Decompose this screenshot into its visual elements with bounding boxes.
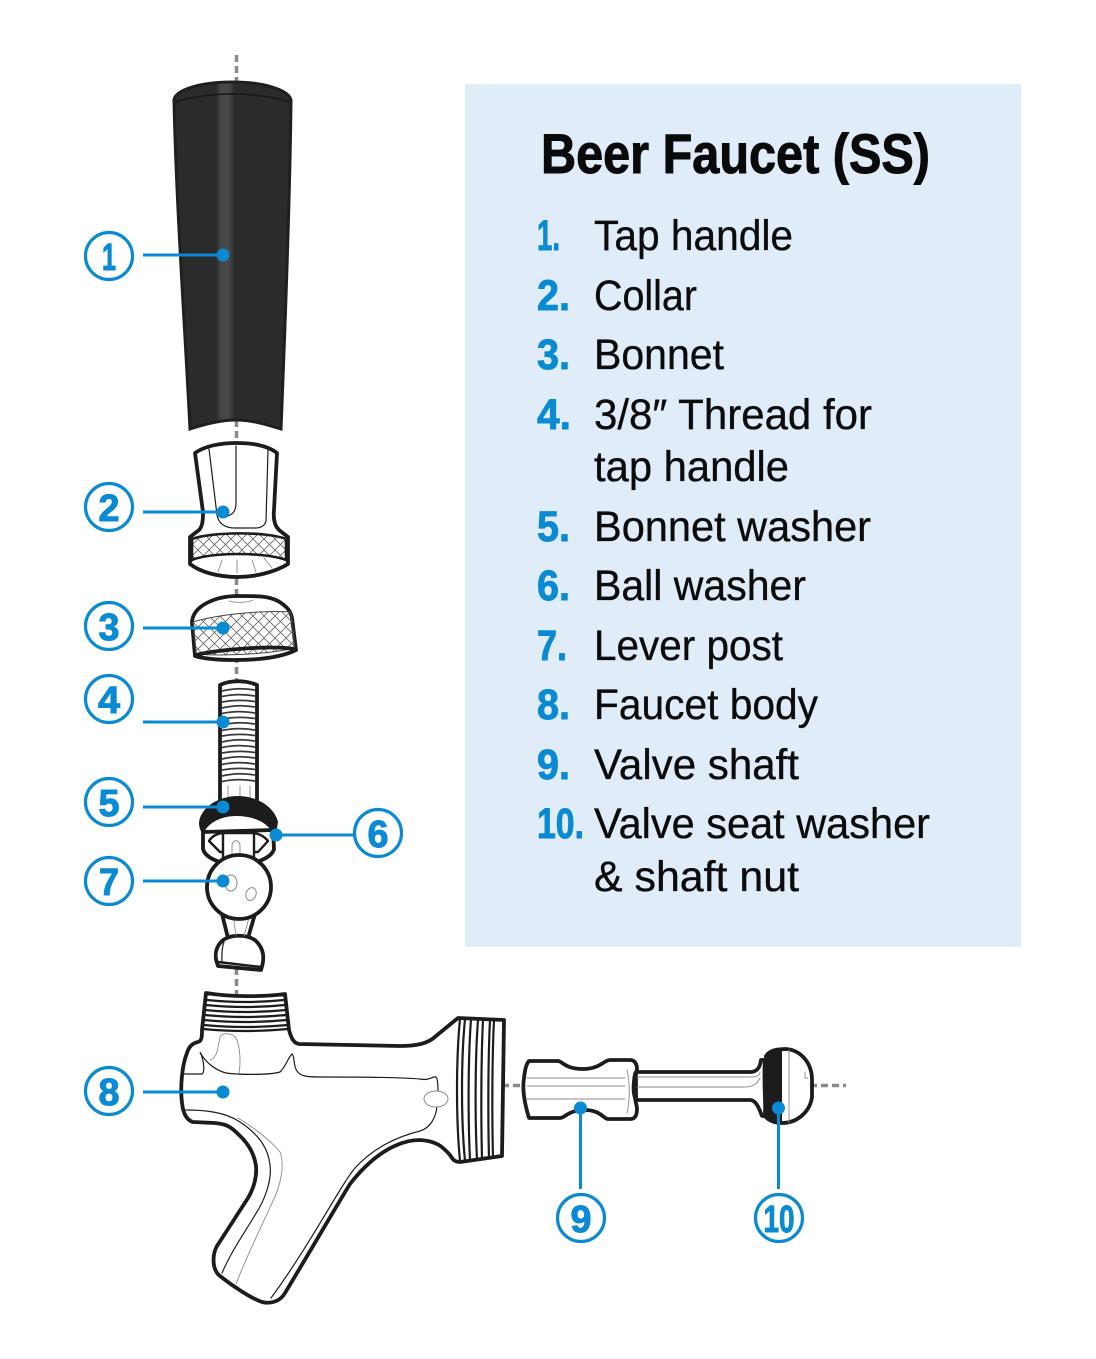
parts list: Lever post <box>594 622 783 670</box>
parts list: 7. <box>537 622 567 670</box>
leader 8 <box>86 1068 230 1114</box>
parts list: Ball washer <box>594 562 806 610</box>
part 5: bonnet washer <box>199 796 278 834</box>
leader 4: 4 <box>98 680 120 722</box>
parts list: 1. <box>537 212 560 260</box>
parts list: Tap handle <box>594 212 793 260</box>
leader 10: 10 <box>764 1199 794 1241</box>
leader 10 <box>756 1102 802 1242</box>
leader 4 <box>86 676 230 728</box>
parts list: Valve seat washer <box>594 800 930 848</box>
leader 6: 6 <box>368 814 388 856</box>
leader 5: 5 <box>98 783 120 825</box>
panel title: Beer Faucet (SS) <box>541 122 930 185</box>
ball and stem <box>222 914 255 938</box>
parts list: 4. <box>537 391 571 439</box>
leader 7 <box>86 858 230 904</box>
parts list: 2. <box>537 272 570 320</box>
part 3: bonnet <box>192 596 296 660</box>
leader 9 <box>558 1102 604 1242</box>
leader 2: 2 <box>98 488 120 530</box>
part 4: threaded rod <box>220 681 257 802</box>
leader 3: 3 <box>98 607 120 649</box>
parts list: Collar <box>594 272 697 320</box>
part 2: collar <box>190 443 288 577</box>
parts list: Faucet body <box>594 681 818 729</box>
parts list: Bonnet washer <box>594 503 871 551</box>
leader 1: 1 <box>102 237 116 279</box>
leader 7: 7 <box>99 862 119 904</box>
body contour lines <box>183 1052 438 1092</box>
parts list: 10. <box>537 800 584 848</box>
parts list: 9. <box>537 741 570 789</box>
part 9: valve shaft handle <box>523 1060 772 1119</box>
leader 3 <box>86 602 230 650</box>
part 1: tap handle <box>174 82 291 429</box>
ball washer seat <box>203 830 274 865</box>
part 7: lever post <box>203 830 274 970</box>
part 10: valve seat washer and shaft nut <box>763 1049 812 1124</box>
parts list: 3/8″ Thread for <box>594 391 872 439</box>
parts list: tap handle <box>594 443 789 491</box>
leader 6 <box>270 810 402 856</box>
top threads <box>203 1000 288 1031</box>
side threads <box>457 1019 494 1161</box>
info panel <box>465 84 1021 947</box>
parts list <box>537 212 930 901</box>
parts list: & shaft nut <box>594 853 799 901</box>
parts list: Bonnet <box>594 331 724 379</box>
part 8: faucet body <box>181 993 504 1303</box>
dashed assembly axis <box>236 55 846 1086</box>
leader 2 <box>86 484 230 530</box>
parts list: 8. <box>537 681 570 729</box>
parts list: Valve shaft <box>594 741 799 789</box>
leader 9: 9 <box>570 1199 592 1241</box>
parts list: 3. <box>537 331 570 379</box>
leader 5 <box>86 778 230 826</box>
leader 8: 8 <box>98 1072 120 1114</box>
leader 1 <box>86 232 230 280</box>
parts list: 6. <box>537 562 570 610</box>
parts list: 5. <box>537 503 570 551</box>
